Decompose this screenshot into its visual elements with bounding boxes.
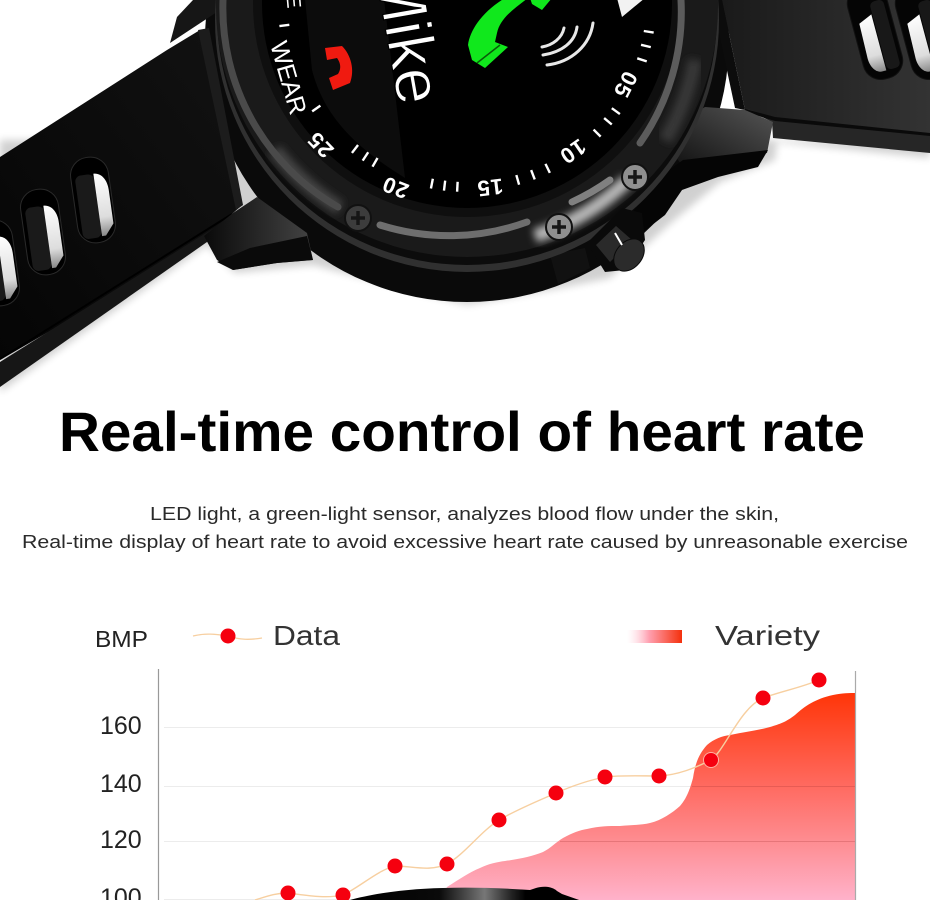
bezel — [215, 0, 719, 272]
icon: green phone — [468, 0, 552, 68]
y axis labels: 120 — [100, 826, 142, 854]
right strap — [712, 0, 930, 153]
description text — [22, 503, 908, 552]
screw — [546, 214, 572, 240]
right axis — [854, 671, 856, 900]
legend: variety — [630, 625, 820, 651]
y axis unit: BMP — [95, 626, 148, 652]
tick marks — [279, 25, 654, 192]
watch photo — [0, 0, 930, 392]
dial numerals: 15 — [475, 173, 505, 202]
strap hole — [68, 155, 118, 245]
icon: red hang-up phone — [325, 46, 352, 90]
y axis labels: 140 — [100, 770, 142, 798]
icon: sound waves — [542, 23, 593, 65]
crown — [587, 208, 651, 277]
screw — [345, 205, 371, 231]
dial numerals: WEAR — [264, 38, 312, 118]
dial numerals: 10 — [555, 134, 591, 169]
grid lines and axes — [158, 669, 769, 900]
strap hole — [891, 0, 930, 84]
watch dial — [262, 0, 672, 208]
description text: LED light, a green-light sensor, analyzes blood flow under the skin, — [150, 503, 779, 524]
case corner block — [550, 248, 590, 284]
strap hole — [18, 187, 68, 277]
lit arc of metal bezel — [535, 180, 628, 236]
groove arcs — [223, 0, 681, 236]
description text: Real-time display of heart rate to avoid excessive heart rate caused by unreasonable exercise — [22, 531, 908, 552]
dial numerals — [264, 0, 643, 204]
left lugs — [170, 0, 313, 270]
legend: variety: Variety — [715, 620, 820, 651]
legend: data: Data — [273, 620, 340, 651]
title: Real-time control of heart rate — [59, 400, 865, 463]
dial numerals: 05 — [608, 67, 643, 102]
left strap — [0, 28, 243, 387]
y axis labels: 160 — [100, 712, 142, 740]
dial numerals: 25 — [302, 126, 339, 163]
watch peeking at bottom — [350, 887, 582, 900]
data points — [280, 672, 826, 900]
y axis labels — [100, 712, 142, 900]
right lug — [630, 107, 773, 232]
icon: white triangle marker — [617, 0, 645, 17]
heart rate chart — [95, 620, 856, 900]
legend: data — [192, 626, 340, 646]
dial numerals: 20 — [378, 171, 412, 204]
grid over area — [560, 786, 855, 842]
strap hole — [0, 218, 22, 308]
screw — [622, 164, 648, 190]
variety area — [440, 693, 856, 900]
data line — [255, 680, 819, 900]
watch case lower body — [205, 0, 729, 302]
soft drop shadow — [0, 140, 930, 392]
strap hole — [843, 0, 907, 84]
